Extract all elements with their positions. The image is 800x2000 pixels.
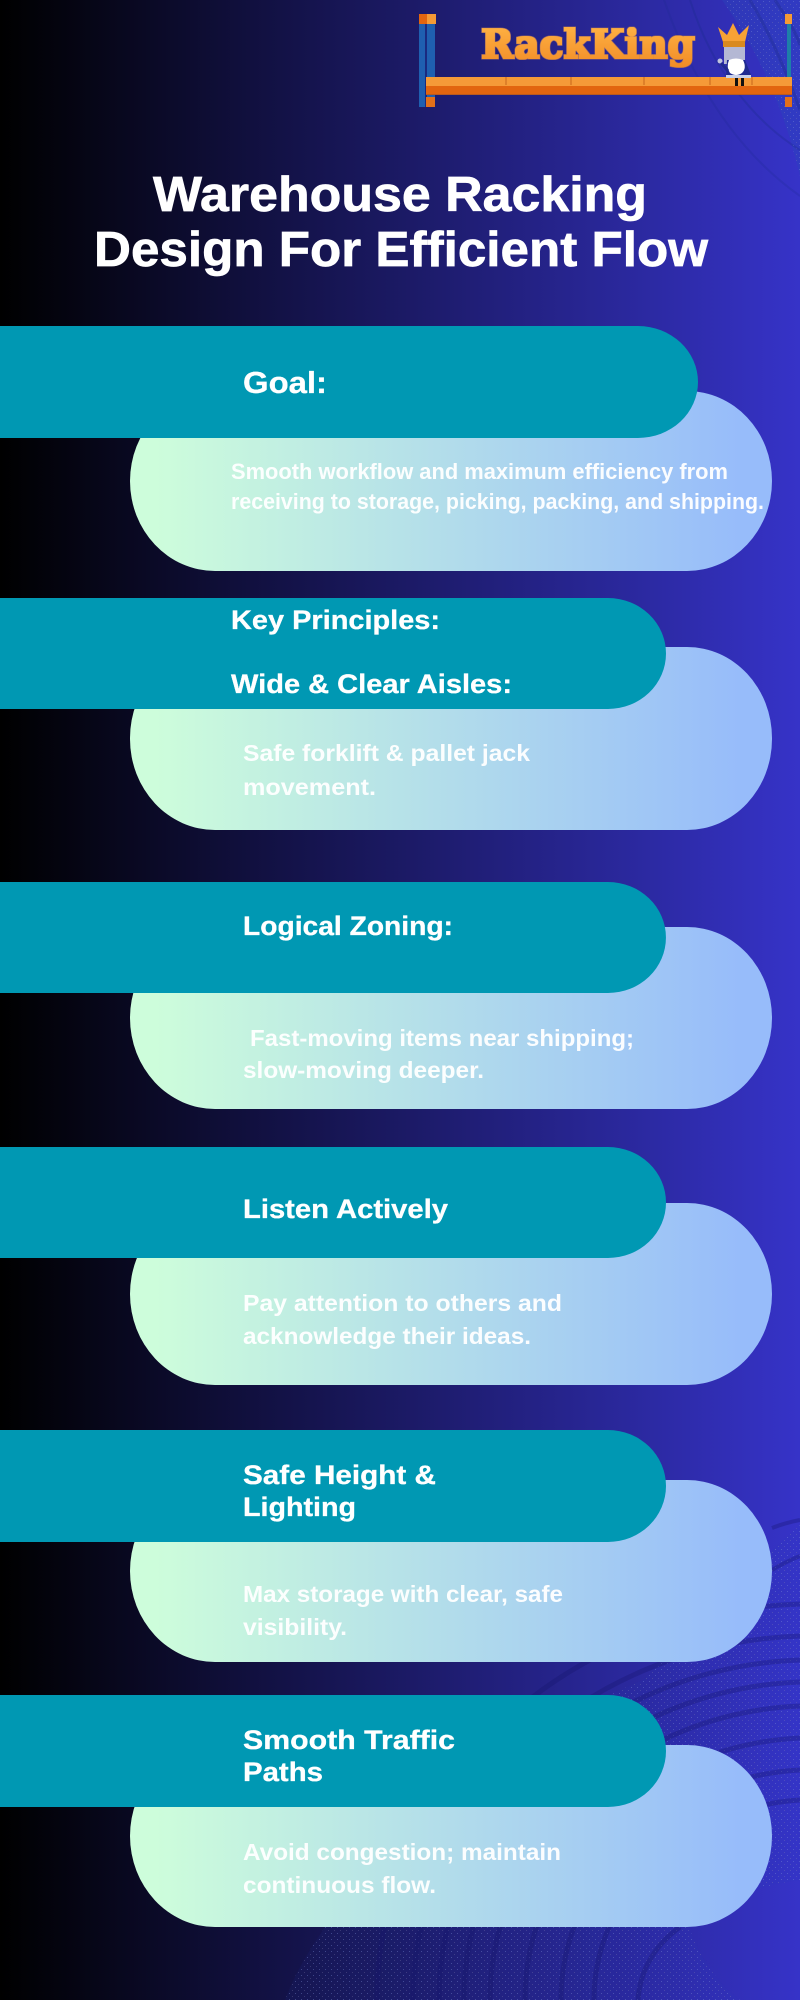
goal description: Smooth workflow and maximum efficiency from [231, 459, 728, 484]
logo right upright [785, 14, 792, 107]
traffic heading [243, 1725, 455, 1787]
listen heading: Listen Actively [243, 1194, 448, 1224]
aisles body card [130, 647, 772, 830]
logo beam [426, 77, 792, 95]
panel: smooth traffic paths [0, 1695, 772, 1927]
panel: logical zoning [0, 882, 772, 1109]
background texture: bottom right contours [285, 1520, 800, 2000]
goal description [231, 459, 764, 514]
background texture: top right contours [664, 0, 800, 196]
panel: listen actively [0, 1147, 772, 1385]
zoning heading: Logical Zoning: [243, 911, 453, 941]
traffic body card [130, 1745, 772, 1927]
goal description: receiving to storage, picking, packing, and shipping. [231, 489, 764, 514]
height body card [130, 1480, 772, 1662]
height description: visibility. [243, 1614, 347, 1640]
traffic description [243, 1839, 561, 1898]
icon: king mascot [718, 23, 751, 86]
title [94, 168, 709, 277]
height heading: Safe Height & [243, 1460, 436, 1490]
zoning description: slow-moving deeper. [243, 1057, 484, 1083]
aisles description: Safe forklift & pallet jack [243, 740, 530, 766]
height description [243, 1581, 563, 1640]
title: Warehouse Racking [153, 168, 647, 222]
aisles heading: Key Principles: [231, 605, 440, 635]
listen description: Pay attention to others and [243, 1290, 562, 1316]
logo left upright [419, 14, 436, 107]
traffic heading bar [0, 1695, 666, 1807]
height heading bar [0, 1430, 666, 1542]
traffic description: Avoid congestion; maintain [243, 1839, 561, 1865]
logo wordmark: RackKing [481, 22, 695, 68]
height description: Max storage with clear, safe [243, 1581, 563, 1607]
listen heading bar [0, 1147, 666, 1258]
aisles description: movement. [243, 774, 376, 800]
panel: goal [0, 326, 772, 571]
aisles heading [231, 605, 512, 699]
height heading [243, 1460, 436, 1522]
traffic heading: Paths [243, 1757, 323, 1787]
listen body card [130, 1203, 772, 1385]
listen description [243, 1290, 562, 1349]
goal heading: Goal: [243, 365, 327, 400]
aisles description [243, 740, 530, 800]
height heading: Lighting [243, 1492, 356, 1522]
logo: RackKing racking beam with king mascot [419, 14, 792, 107]
panel: wide and clear aisles [0, 598, 772, 830]
zoning description: Fast-moving items near shipping; [250, 1025, 634, 1051]
aisles heading: Wide & Clear Aisles: [231, 669, 512, 699]
zoning body card [130, 927, 772, 1109]
listen description: acknowledge their ideas. [243, 1323, 531, 1349]
goal heading bar [0, 326, 698, 438]
zoning description [243, 1025, 634, 1083]
panel: safe height and lighting [0, 1430, 772, 1662]
aisles heading bar [0, 598, 666, 709]
traffic description: continuous flow. [243, 1872, 436, 1898]
traffic heading: Smooth Traffic [243, 1725, 455, 1755]
zoning heading bar [0, 882, 666, 993]
title: Design For Efficient Flow [94, 223, 709, 277]
goal body card [130, 391, 772, 571]
